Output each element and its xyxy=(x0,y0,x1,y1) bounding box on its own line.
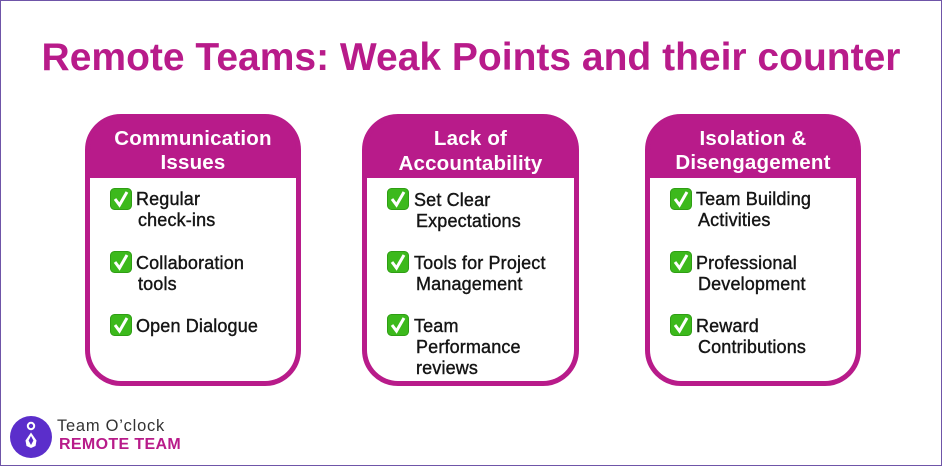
panel header: lack of accountability: Lack of xyxy=(434,127,507,150)
item: open dialogue xyxy=(110,314,258,336)
panel: isolation and disengagement: Professional xyxy=(696,253,797,273)
panel: isolation and disengagement: Reward xyxy=(696,316,759,336)
logo text: Team O’clock xyxy=(57,417,165,435)
panel: lack of accountability: Set Clear xyxy=(414,190,490,210)
logo text: REMOTE TEAM xyxy=(59,436,181,453)
panel header: communication issues: Issues xyxy=(160,151,226,174)
title: Remote Teams: Weak Points and their counter xyxy=(42,36,900,79)
panel: lack of accountability: Management xyxy=(416,274,523,294)
panel: lack of accountability: reviews xyxy=(416,358,478,378)
panel: isolation and disengagement: Development xyxy=(698,274,806,294)
panel: lack of accountability: Expectations xyxy=(416,211,521,231)
panel header: communication issues: Communication xyxy=(114,127,272,150)
panel: isolation and disengagement: Contributions xyxy=(698,337,806,357)
panel header: isolation and disengagement: Isolation & xyxy=(700,127,806,150)
item: team building activities xyxy=(670,188,811,230)
panel: lack of accountability: Tools for Project xyxy=(414,253,546,273)
logo: Team O'clock Remote Team xyxy=(10,416,181,458)
item: set clear expectations xyxy=(387,188,521,232)
panel: communication issues xyxy=(85,114,301,386)
panel: isolation and disengagement xyxy=(645,114,861,386)
item: professional development xyxy=(670,251,806,294)
panel header: lack of accountability xyxy=(398,127,543,175)
panel: lack of accountability xyxy=(362,114,579,386)
item: collaboration tools xyxy=(110,251,244,294)
panel header: communication issues xyxy=(114,127,272,174)
icon: necktie badge xyxy=(10,416,52,458)
item: tools for project management xyxy=(387,251,546,294)
panel header: isolation and disengagement xyxy=(675,127,831,174)
panel: lack of accountability: Performance xyxy=(416,337,521,357)
item: regular check-ins xyxy=(110,188,215,230)
panel header: lack of accountability: Accountability xyxy=(398,152,543,175)
panel: communication issues: tools xyxy=(138,274,177,294)
panel: isolation and disengagement: Activities xyxy=(698,210,771,230)
panel: communication issues: Regular xyxy=(136,189,200,209)
panel: communication issues: Open Dialogue xyxy=(136,316,258,336)
panel: lack of accountability: Team xyxy=(414,316,459,336)
panel: communication issues: Collaboration xyxy=(136,253,244,273)
logo text xyxy=(57,417,181,453)
panel header: isolation and disengagement: Disengagement xyxy=(675,151,831,174)
item: team performance reviews xyxy=(387,314,521,378)
panel: communication issues: check-ins xyxy=(138,210,215,230)
panel: isolation and disengagement: Team Building xyxy=(696,189,811,209)
item: reward contributions xyxy=(670,314,806,357)
